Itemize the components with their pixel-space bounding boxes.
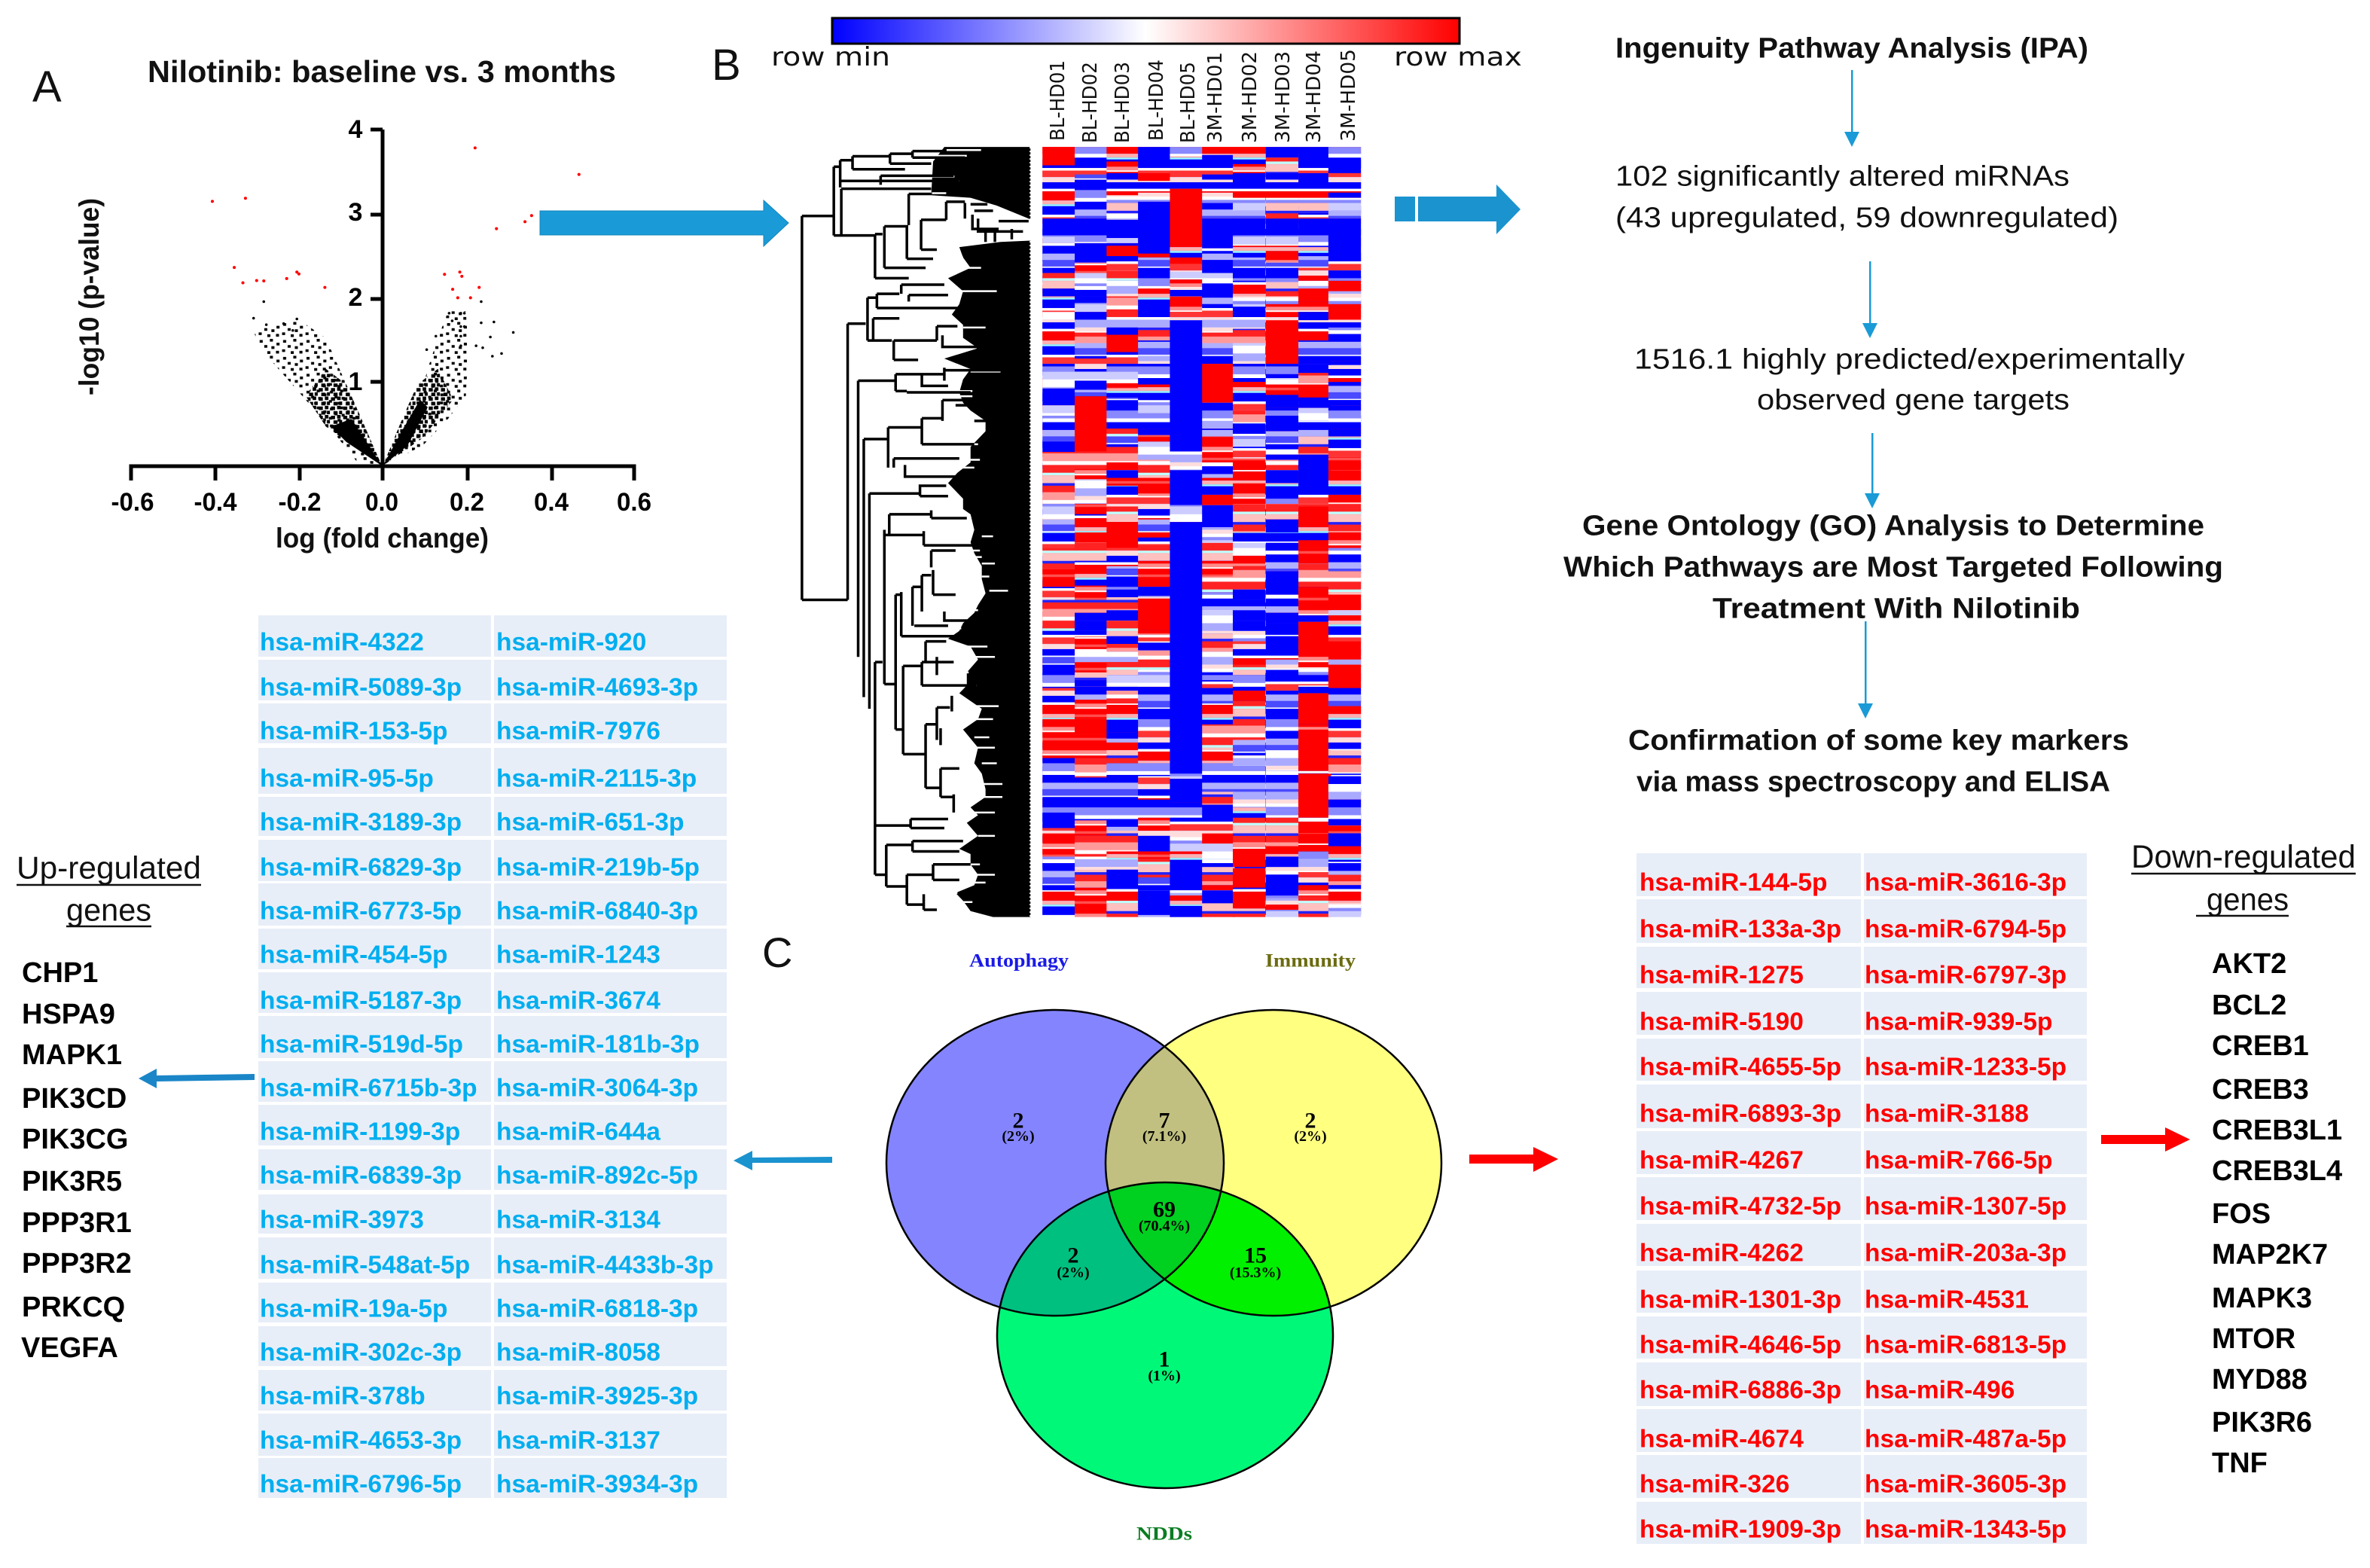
up-regulated gene list: CHP1 [22,957,98,989]
heatmap column 3M-HD01 [1202,147,1234,917]
x axis tick labels: 0.2 [450,488,484,517]
arrow: table to up-regulated genes [139,1069,255,1088]
arrow: Venn to down-regulated table [1469,1147,1558,1172]
arrow: flow step 4 [1858,621,1873,718]
down-regulated miRNA names: hsa-miR-1307-5p [1865,1193,2067,1220]
Venn region counts: 69 [1153,1197,1176,1222]
Venn region counts: (2%) [1294,1128,1327,1145]
Venn set labels [969,950,1356,1544]
up-regulated miRNA names: hsa-miR-302c-3p [260,1339,462,1366]
Venn region counts: (70.4%) [1139,1218,1190,1234]
y axis tick labels: 2 [349,283,362,312]
arrow: heatmap to pathway analysis [1395,185,1521,234]
Venn region counts: 15 [1244,1243,1267,1268]
table: down-regulated miRNAs [1636,852,2087,1545]
down-regulated miRNA names: hsa-miR-6794-5p [1865,916,2067,943]
up-regulated miRNA names: hsa-miR-3134 [496,1207,660,1234]
down-regulated miRNA names: hsa-miR-4267 [1639,1146,1804,1175]
Venn region counts: (2%) [1002,1128,1035,1145]
up-regulated miRNA names [260,628,714,1499]
flow step: gene ontology: Gene Ontology (GO) Analysis to Determine [1582,511,2204,542]
volcano plot title: Nilotinib: baseline vs. 3 months [148,54,616,89]
arrow: Venn to up-regulated table [734,1151,832,1170]
up-regulated gene list: PIK3CD [22,1083,127,1115]
down-regulated genes heading [2131,839,2356,917]
heatmap column labels: 3M-HD01 [1204,52,1227,143]
down-regulated miRNA names: hsa-miR-1301-3p [1639,1286,1841,1313]
up-regulated miRNA names: hsa-miR-3189-3p [260,809,462,836]
flow step: gene ontology: Treatment With Nilotinib [1713,593,2080,625]
heatmap column 3M-HD05 [1328,147,1361,917]
Venn region counts: 1 [1158,1347,1170,1372]
up-regulated miRNA names: hsa-miR-644a [496,1118,660,1146]
Venn circle outlines [886,1010,1441,1488]
up-regulated miRNA names: hsa-miR-4322 [260,628,424,657]
up-regulated miRNA names: hsa-miR-1243 [496,941,660,969]
up-regulated miRNA names: hsa-miR-19a-5p [260,1295,447,1322]
panel letter B: B [712,41,741,90]
x axis tick labels: 0.6 [617,488,651,517]
down-regulated genes heading: Down-regulated [2131,839,2356,875]
arrow: table to down-regulated genes [2101,1127,2190,1152]
down-regulated miRNA names: hsa-miR-4655-5p [1639,1053,1841,1081]
down-regulated gene list: FOS [2212,1198,2271,1230]
up-regulated genes heading [17,850,201,928]
Venn region counts: (15.3%) [1230,1264,1281,1281]
flow step: gene targets: 1516.1 highly predicted/experimentally [1634,343,2185,375]
up-regulated miRNA names: hsa-miR-6796-5p [260,1470,462,1499]
up-regulated miRNA names: hsa-miR-3064-3p [496,1074,698,1103]
down-regulated gene list: CREB3L4 [2212,1155,2342,1187]
Venn set labels: Autophagy [969,950,1069,972]
up-regulated miRNA names: hsa-miR-1199-3p [260,1118,460,1146]
down-regulated miRNA names: hsa-miR-133a-3p [1639,916,1841,943]
down-regulated gene list: MAPK3 [2212,1283,2312,1314]
down-regulated miRNA names: hsa-miR-4646-5p [1639,1332,1841,1359]
panel C: Venn diagram [886,950,1441,1544]
down-regulated miRNA names: hsa-miR-4732-5p [1639,1193,1841,1220]
up-regulated miRNA names: hsa-miR-2115-3p [496,765,697,792]
down-regulated miRNA names: hsa-miR-1275 [1639,961,1804,990]
y axis title: -log10 (p-value) [74,198,105,395]
Venn region counts: 7 [1158,1109,1170,1133]
up-regulated gene list: MAPK1 [22,1039,122,1071]
down-regulated miRNA names: hsa-miR-3188 [1865,1100,2029,1128]
up-regulated miRNA names: hsa-miR-8058 [496,1339,660,1366]
down-regulated miRNA names: hsa-miR-5190 [1639,1008,1804,1036]
x axis tick labels: -0.4 [194,488,237,517]
y axis tick labels: 4 [349,115,363,144]
up-regulated miRNA names: hsa-miR-95-5p [260,765,434,792]
panel B: dendrogram and heatmap [802,147,1361,917]
flow step: confirmation [1628,725,2129,798]
down-regulated miRNA names: hsa-miR-4674 [1639,1425,1804,1454]
up-regulated miRNA names: hsa-miR-5089-3p [260,673,462,702]
up-regulated miRNA names: hsa-miR-651-3p [496,809,684,836]
heatmap column labels: BL-HD04 [1145,59,1168,141]
up-regulated miRNA names: hsa-miR-6829-3p [260,854,462,881]
up-regulated gene list: PPP3R2 [22,1248,132,1280]
arrow: volcano to heatmap [540,200,788,246]
up-regulated genes heading: genes [66,892,151,928]
up-regulated miRNA names: hsa-miR-454-5p [260,941,447,969]
down-regulated gene list: CREB3L1 [2212,1115,2342,1146]
up-regulated miRNA names: hsa-miR-4693-3p [496,673,698,702]
x axis tick labels: -0.2 [279,488,321,517]
up-regulated gene list: HSPA9 [22,999,115,1030]
volcano axes [131,130,634,480]
down-regulated miRNA names: hsa-miR-6886-3p [1639,1377,1841,1404]
Venn region counts: (7.1%) [1142,1128,1186,1145]
up-regulated miRNA names: hsa-miR-3137 [496,1426,660,1455]
heatmap column BL-HD01 [1042,147,1075,917]
down-regulated miRNA names: hsa-miR-6893-3p [1639,1100,1841,1128]
y axis tick labels [349,115,363,396]
y axis tick labels: 3 [349,198,362,227]
heatmap column labels: BL-HD02 [1079,62,1102,143]
up-regulated miRNA names: hsa-miR-7976 [496,717,660,746]
down-regulated gene list: MTOR [2212,1323,2295,1355]
flow step: confirmation: Confirmation of some key markers [1628,725,2129,756]
up-regulated gene list: PIK3R5 [22,1166,122,1197]
heatmap column labels: 3M-HD04 [1303,50,1325,143]
flow step: gene targets [1634,343,2185,416]
down-regulated miRNA names: hsa-miR-1233-5p [1865,1053,2067,1081]
x axis tick labels: 0.4 [534,488,569,517]
up-regulated miRNA names: hsa-miR-4653-3p [260,1426,462,1455]
down-regulated miRNA names: hsa-miR-487a-5p [1865,1425,2067,1454]
up-regulated miRNA names: hsa-miR-3973 [260,1207,424,1234]
heatmap column BL-HD02 [1075,147,1107,917]
up-regulated miRNA names: hsa-miR-519d-5p [260,1030,463,1059]
x axis tick labels: -0.6 [111,488,154,517]
down-regulated miRNA names: hsa-miR-6813-5p [1865,1332,2067,1359]
heatmap column labels: BL-HD01 [1047,60,1069,141]
down-regulated miRNA names: hsa-miR-326 [1639,1470,1789,1499]
arrow: flow step 2 [1862,261,1877,338]
x axis tick labels [111,488,651,517]
heatmap column BL-HD04 [1138,147,1170,917]
up-regulated miRNA names: hsa-miR-378b [260,1383,426,1410]
down-regulated miRNA names: hsa-miR-4262 [1639,1240,1804,1267]
heatmap column labels: 3M-HD03 [1272,51,1295,143]
up-regulated miRNA names: hsa-miR-6840-3p [496,898,698,925]
down-regulated miRNA names: hsa-miR-144-5p [1639,869,1827,896]
flow step: altered miRNAs [1615,161,2118,233]
panel letter A: A [32,63,62,111]
up-regulated miRNA names: hsa-miR-219b-5p [496,854,700,881]
Venn region counts: (1%) [1148,1368,1181,1384]
flow step: gene ontology [1563,511,2223,625]
down-regulated miRNA names: hsa-miR-939-5p [1865,1008,2052,1036]
up-regulated gene list: PPP3R1 [22,1207,132,1239]
up-regulated gene list: PRKCQ [22,1292,125,1323]
down-regulated gene list [2212,948,2342,1479]
up-regulated miRNA names: hsa-miR-181b-3p [496,1030,700,1059]
x axis title: log (fold change) [276,523,489,554]
up-regulated gene list [21,957,132,1364]
up-regulated miRNA names: hsa-miR-548at-5p [260,1252,470,1279]
up-regulated miRNA names: hsa-miR-153-5p [260,717,447,746]
down-regulated miRNA names: hsa-miR-1343-5p [1865,1515,2067,1544]
panel letter C: C [762,929,792,976]
up-regulated miRNA names: hsa-miR-920 [496,628,646,657]
heatmap column BL-HD03 [1106,147,1139,917]
Venn set labels: Immunity [1265,950,1356,972]
up-regulated miRNA names: hsa-miR-6715b-3p [260,1074,477,1103]
up-regulated genes heading: Up-regulated [17,850,201,886]
up-regulated miRNA names: hsa-miR-5187-3p [260,987,462,1015]
heatmap column labels: BL-HD03 [1112,62,1134,143]
x axis tick labels: 0.0 [365,488,398,517]
Venn region counts: 2 [1304,1109,1316,1133]
flow step: gene targets: observed gene targets [1757,384,2070,416]
down-regulated miRNA names: hsa-miR-496 [1865,1377,2015,1404]
flow step: confirmation: via mass spectroscopy and ELISA [1636,767,2110,798]
up-regulated miRNA names: hsa-miR-3925-3p [496,1383,698,1410]
down-regulated gene list: MAP2K7 [2212,1239,2328,1271]
up-regulated miRNA names: hsa-miR-3934-3p [496,1470,698,1499]
arrow: flow step 3 [1865,433,1880,508]
heatmap column 3M-HD04 [1298,147,1331,917]
up-regulated miRNA names: hsa-miR-6773-5p [260,898,462,925]
down-regulated miRNA names: hsa-miR-203a-3p [1865,1240,2067,1267]
up-regulated miRNA names: hsa-miR-6818-3p [496,1295,698,1322]
flow step: IPA: Ingenuity Pathway Analysis (IPA) [1615,33,2088,65]
Venn region counts: 2 [1068,1243,1078,1268]
down-regulated gene list: AKT2 [2212,948,2286,980]
down-regulated miRNA names: hsa-miR-4531 [1865,1286,2029,1313]
up-regulated miRNA names: hsa-miR-4433b-3p [496,1252,714,1279]
down-regulated genes heading: genes [2207,881,2289,917]
flow step: gene ontology: Which Pathways are Most Targeted Following [1563,551,2223,583]
heatmap column labels: BL-HD05 [1177,62,1200,143]
y axis tick labels: 1 [349,368,362,396]
down-regulated gene list: CREB1 [2212,1030,2309,1062]
panel: pathway analysis flowchart [1563,33,2223,798]
up-regulated miRNA names: hsa-miR-3674 [496,987,660,1015]
up-regulated gene list: PIK3CG [22,1124,128,1155]
row min label: row min [771,42,890,72]
down-regulated miRNA names [1639,869,2067,1544]
Venn set labels: NDDs [1136,1524,1192,1544]
down-regulated miRNA names: hsa-miR-3616-3p [1865,869,2067,896]
heatmap column labels: 3M-HD02 [1239,51,1261,143]
Venn region counts [1002,1109,1327,1384]
heatmap column labels [1047,49,1360,143]
down-regulated gene list: TNF [2212,1448,2268,1479]
down-regulated gene list: MYD88 [2212,1364,2307,1396]
heatmap colour scale [771,18,1522,72]
panel A: volcano plot [74,54,651,554]
down-regulated gene list: CREB3 [2212,1074,2309,1106]
Venn region counts: 2 [1012,1109,1024,1133]
down-regulated miRNA names: hsa-miR-1909-3p [1639,1515,1841,1544]
Venn region counts: (2%) [1057,1264,1090,1281]
arrow: flow step 1 [1844,70,1859,147]
down-regulated miRNA names: hsa-miR-766-5p [1865,1146,2052,1175]
down-regulated miRNA names: hsa-miR-3605-3p [1865,1470,2067,1499]
up-regulated gene list: VEGFA [21,1332,118,1364]
heatmap column 3M-HD03 [1266,147,1298,917]
dendrogram [802,147,1030,917]
heatmap column BL-HD05 [1170,147,1203,917]
up-regulated miRNA names: hsa-miR-6839-3p [260,1161,462,1190]
flow step: altered miRNAs: 102 significantly altered miRNAs [1615,161,2070,193]
heatmap column labels: 3M-HD05 [1338,49,1360,142]
up-regulated miRNA names: hsa-miR-892c-5p [496,1161,698,1190]
down-regulated gene list: PIK3R6 [2212,1407,2312,1438]
volcano data points [212,148,579,465]
down-regulated gene list: BCL2 [2212,990,2286,1021]
table: up-regulated miRNAs [258,614,727,1499]
heatmap column 3M-HD02 [1233,147,1265,917]
flow step: altered miRNAs: (43 upregulated, 59 downregulated) [1615,202,2118,233]
Venn circle fills [886,1010,1441,1488]
row max label: row max [1394,42,1522,72]
down-regulated miRNA names: hsa-miR-6797-3p [1865,961,2067,990]
heatmap [1042,147,1361,917]
